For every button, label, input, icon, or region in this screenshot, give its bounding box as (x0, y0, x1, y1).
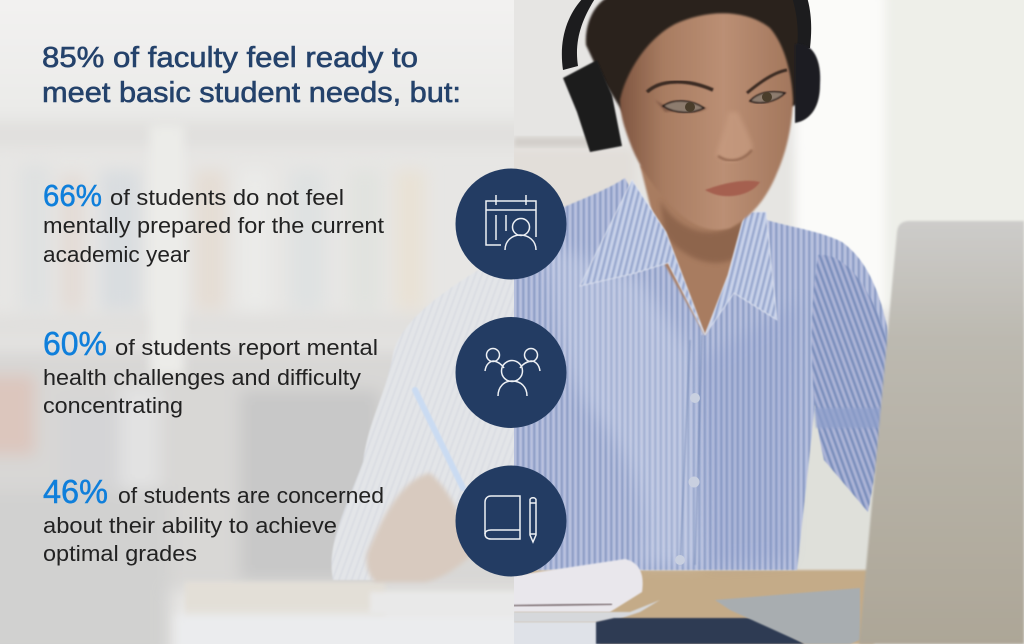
stat block: 46% (43, 473, 384, 566)
stat block: 46%: of students are concerned (118, 483, 384, 508)
laptop (715, 221, 1024, 644)
stat block: 46%: 46% (43, 473, 108, 510)
neck (640, 165, 750, 335)
eyebrows, eyes, nose and mouth (647, 70, 787, 196)
stat block: 60%: concentrating (43, 393, 183, 418)
stat block: 46%: optimal grades (43, 541, 197, 566)
stat block: 46%: about their ability to achieve (43, 513, 337, 538)
stat block: 66%: academic year (43, 242, 190, 267)
title (42, 42, 461, 109)
shirt (505, 178, 895, 570)
collar (580, 180, 705, 335)
stat block: 60%: 60% (43, 325, 107, 362)
stat block: 66%: of students do not feel (110, 185, 344, 210)
stat block: 66%: 66% (43, 178, 102, 213)
icon: calendar with person (456, 168, 566, 280)
gap behind the sleeve (880, 300, 881, 301)
stat block: 60%: of students report mental (115, 335, 378, 360)
hair (584, 0, 798, 112)
title: meet basic student needs, but: (42, 77, 461, 109)
stat block: 60% (43, 325, 378, 418)
phone on desk (596, 618, 805, 644)
face (620, 13, 793, 230)
icon: group of three people (456, 317, 566, 428)
stat block: 66%: mentally prepared for the current (43, 213, 384, 238)
icon: book and pencil (456, 466, 566, 576)
blurred hand (366, 473, 472, 582)
background photo: woman with headphones at laptop (514, 0, 1024, 644)
title: 85% of faculty feel ready to (42, 42, 418, 74)
desk (514, 570, 874, 644)
notebook (505, 559, 660, 644)
desk (186, 582, 378, 612)
stat block: 66% (43, 178, 384, 267)
blurred pen (415, 390, 463, 488)
blurred arm and cuff (331, 272, 514, 580)
stat block: 60%: health challenges and difficulty (43, 365, 361, 390)
translucent left panel over blurred photo (0, 0, 540, 644)
headphones (562, 0, 820, 152)
